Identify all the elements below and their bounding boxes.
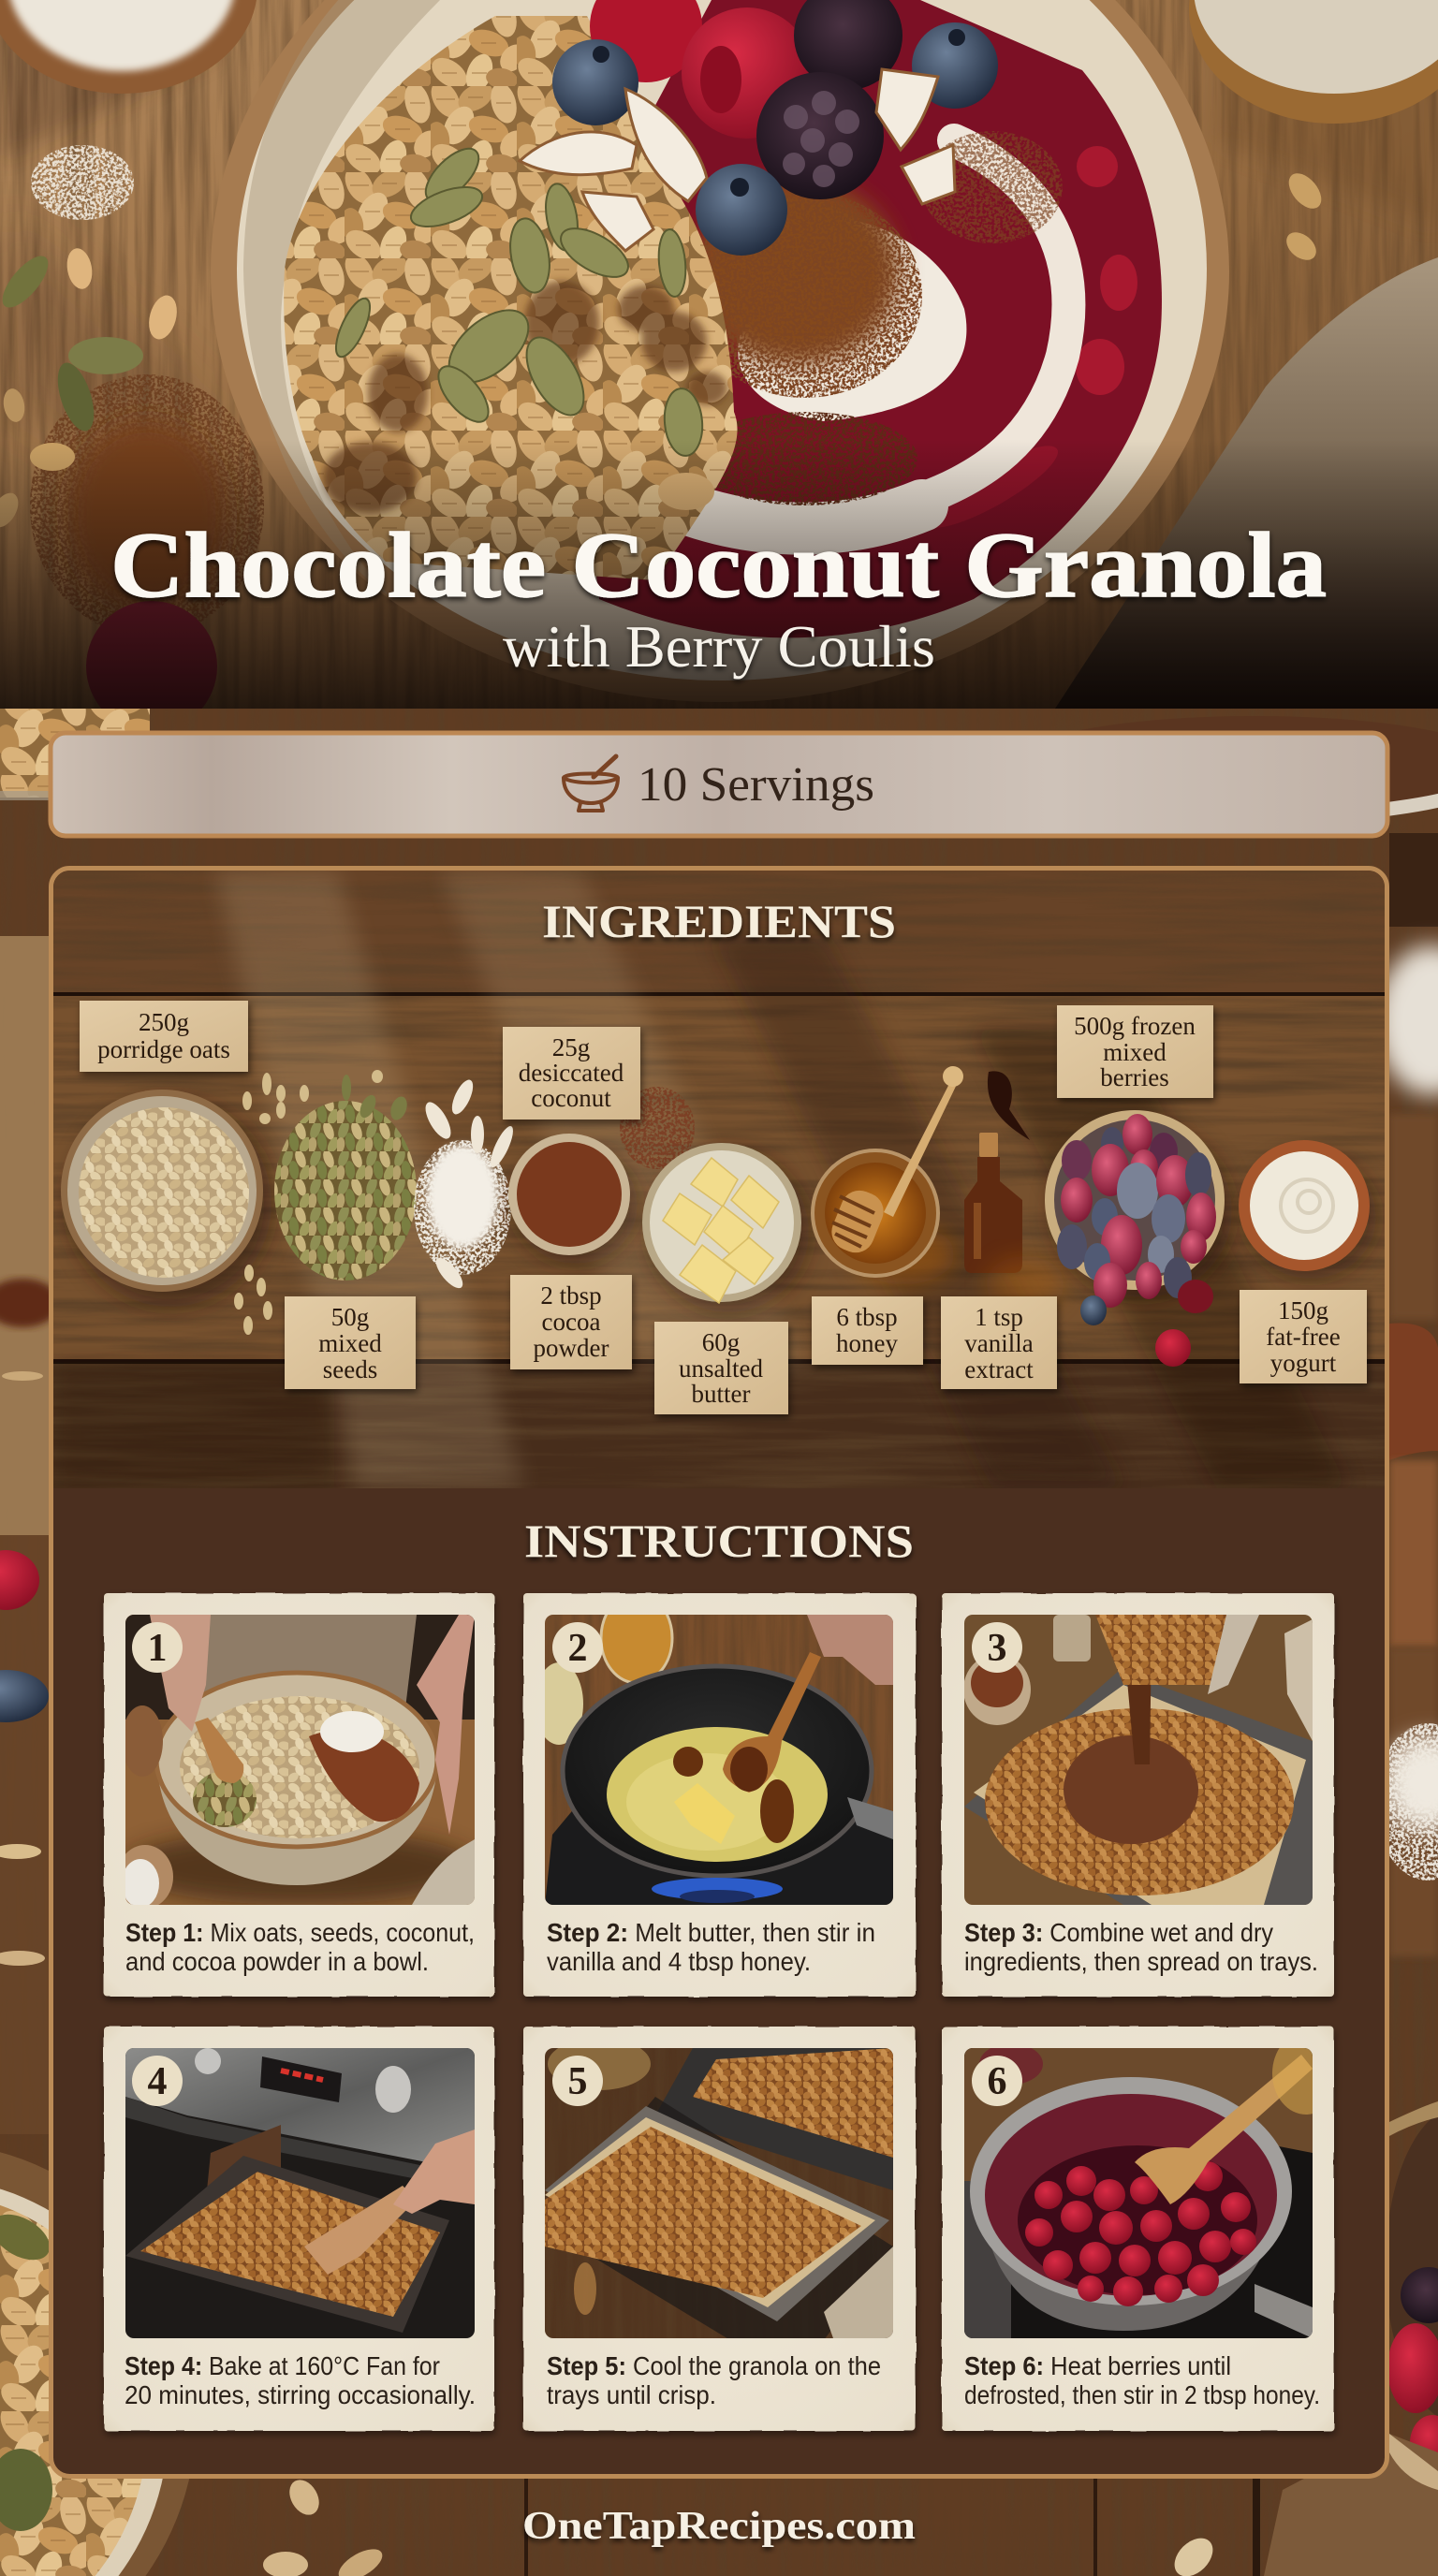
number badge 3: [972, 1622, 1022, 1673]
coconut shards: [520, 69, 955, 251]
yogurt swirl arcs: [646, 140, 1068, 529]
number badge 4: [132, 2056, 183, 2106]
label: fat-free yogurt: yogurt: [1270, 1349, 1337, 1377]
number badge 6: [972, 2056, 1022, 2106]
step 3 text: [964, 1918, 1318, 1976]
label: cocoa powder: 2 tbsp: [540, 1281, 602, 1310]
label: unsalted butter: unsalted: [679, 1354, 763, 1383]
photo: cooling trays: [545, 2038, 893, 2340]
vanilla bottle: [964, 1071, 1064, 1312]
label: unsalted butter: 60g: [702, 1328, 740, 1356]
label: porridge oats: porridge oats: [97, 1035, 230, 1063]
light rays: [215, 871, 524, 1488]
coulis highlights: [936, 146, 1137, 528]
number badge 3: 3: [987, 1627, 1007, 1670]
instructions heading: INSTRUCTIONS: [524, 1515, 914, 1567]
mixed seeds pile: [234, 1070, 417, 1335]
label: vanilla extract: vanilla: [964, 1329, 1034, 1357]
number badge 2: 2: [567, 1627, 588, 1670]
servings text: 10 Servings: [638, 758, 874, 812]
photo: mixing bowl: [117, 1615, 477, 1909]
step 4 text: [125, 2351, 476, 2409]
label: frozen mixed berries: 500g frozen: [1074, 1012, 1196, 1040]
step 2 text: Step 2: Melt butter, then stir in: [547, 1918, 875, 1947]
step 5 text: Step 5: Cool the granola on the: [547, 2351, 881, 2380]
step 2 text: [547, 1918, 875, 1976]
blueberries: [552, 22, 998, 256]
label: unsalted butter: butter: [692, 1380, 750, 1408]
photo: melting butter in pan: [535, 1593, 893, 1905]
card: step 2: [523, 1593, 916, 1997]
frozen berries bowl: [1045, 1110, 1232, 1367]
number badge 5: 5: [567, 2060, 588, 2103]
card: step 4: [104, 2027, 494, 2431]
number badge 1: 1: [148, 1627, 167, 1670]
icon: bowl with spoon: [564, 756, 618, 811]
card: step 1: [104, 1593, 494, 1997]
number badge 6: 6: [987, 2060, 1007, 2103]
cocoa powder dusting: [688, 131, 1063, 505]
step 4 text: Step 4: Bake at 160°C Fan for: [125, 2351, 440, 2380]
label: mixed seeds: 50g: [331, 1303, 369, 1331]
label: desiccated coconut: desiccated: [519, 1059, 624, 1087]
desiccated coconut pile: [414, 1076, 517, 1292]
oats bowl: [61, 1090, 271, 1307]
bottom darkening behind title: [0, 0, 1438, 709]
coconut dish, top left: [0, 0, 257, 220]
background: rustic wood table with scattered ingredients: [0, 709, 1438, 2576]
number badge 4: 4: [148, 2060, 167, 2103]
granola pile: [284, 16, 738, 580]
honey jar with dipper: [813, 1066, 963, 1284]
label: vanilla extract: extract: [964, 1355, 1034, 1383]
butter plate: [642, 1143, 809, 1312]
scattered seeds and oats: [0, 168, 1328, 532]
label: fat-free yogurt: [1240, 1290, 1367, 1383]
card: step 6: [942, 2027, 1340, 2431]
wood table in hero: [0, 0, 1438, 709]
step 1 text: [125, 1918, 475, 1976]
step 1 text: and cocoa powder in a bowl.: [125, 1947, 429, 1976]
label: desiccated coconut: 25g: [552, 1033, 590, 1061]
label: porridge oats: 250g: [139, 1008, 189, 1036]
number badge 5: [552, 2056, 603, 2106]
number badge 2: [552, 1622, 603, 1673]
label: porridge oats: [80, 1001, 248, 1072]
label: fat-free yogurt: 150g: [1278, 1296, 1328, 1325]
berry coulis: [562, 0, 1162, 637]
number badge 1: [132, 1622, 183, 1673]
dark raspberry, bottom left: [86, 601, 217, 709]
step 6 text: [964, 2351, 1320, 2409]
label: frozen mixed berries: mixed: [1103, 1038, 1167, 1066]
step 6 text: Step 6: Heat berries until: [964, 2351, 1231, 2380]
label: mixed seeds: mixed: [318, 1329, 382, 1357]
label: desiccated coconut: [503, 1027, 640, 1120]
photo: spreading on tray: [963, 1615, 1313, 1905]
card: step 3: [942, 1593, 1334, 1997]
step 1 text: Step 1: Mix oats, seeds, coconut,: [125, 1918, 475, 1947]
label: frozen mixed berries: [1057, 1005, 1213, 1098]
card: step 5: [523, 2027, 916, 2431]
pumpkin seeds: [330, 140, 705, 458]
label: honey: [812, 1296, 923, 1365]
label: honey: honey: [836, 1329, 898, 1357]
label: desiccated coconut: coconut: [531, 1084, 611, 1112]
photo: oven with tray: [125, 2048, 475, 2338]
step 6 text: defrosted, then stir in 2 tbsp honey.: [964, 2380, 1320, 2409]
label: vanilla extract: 1 tsp: [975, 1303, 1023, 1331]
label: frozen mixed berries: berries: [1100, 1063, 1169, 1091]
title: Chocolate Coconut Granola: [110, 513, 1327, 617]
stoneware bowl: [211, 0, 1229, 702]
label: vanilla extract: [941, 1296, 1057, 1389]
label: cocoa powder: powder: [534, 1334, 609, 1362]
servings bar: [51, 733, 1387, 836]
step 2 text: vanilla and 4 tbsp honey.: [547, 1947, 811, 1976]
yogurt dish: [1239, 1140, 1376, 1279]
label: mixed seeds: [285, 1296, 416, 1389]
footer brand: OneTapRecipes.com: [522, 2505, 916, 2548]
step 3 text: ingredients, then spread on trays.: [964, 1947, 1318, 1976]
ingredients heading: INGREDIENTS: [542, 895, 896, 947]
planks: [53, 871, 1385, 1488]
step 3 text: Step 3: Combine wet and dry: [964, 1918, 1273, 1947]
yogurt dollop: [738, 217, 966, 421]
cocoa spill on table: [30, 374, 264, 637]
raspberries: [590, 0, 813, 139]
stoneware cup, top right: [1189, 0, 1438, 124]
step 5 text: [547, 2351, 881, 2409]
linen napkin: [1055, 257, 1438, 709]
label: honey: 6 tbsp: [836, 1303, 898, 1331]
step 4 text: 20 minutes, stirring occasionally.: [125, 2380, 476, 2409]
oat on yogurt: [658, 473, 714, 510]
main panel frame: [51, 869, 1387, 2477]
label: mixed seeds: seeds: [323, 1355, 377, 1383]
panel: ingredients wooden board: [53, 871, 1385, 1488]
label: unsalted butter: [654, 1322, 788, 1414]
blackberries: [756, 0, 902, 199]
label: cocoa powder: [510, 1275, 632, 1369]
dark granola clusters: [323, 281, 727, 513]
hero photo: granola bowl with berry coulis: [0, 0, 1438, 732]
label: fat-free yogurt: fat-free: [1266, 1323, 1341, 1351]
photo: berries in saucepan: [964, 2032, 1340, 2338]
step 5 text: trays until crisp.: [547, 2380, 716, 2409]
label: cocoa powder: cocoa: [542, 1308, 600, 1336]
subtitle: with Berry Coulis: [503, 613, 935, 680]
cocoa bowl: [508, 1087, 695, 1264]
